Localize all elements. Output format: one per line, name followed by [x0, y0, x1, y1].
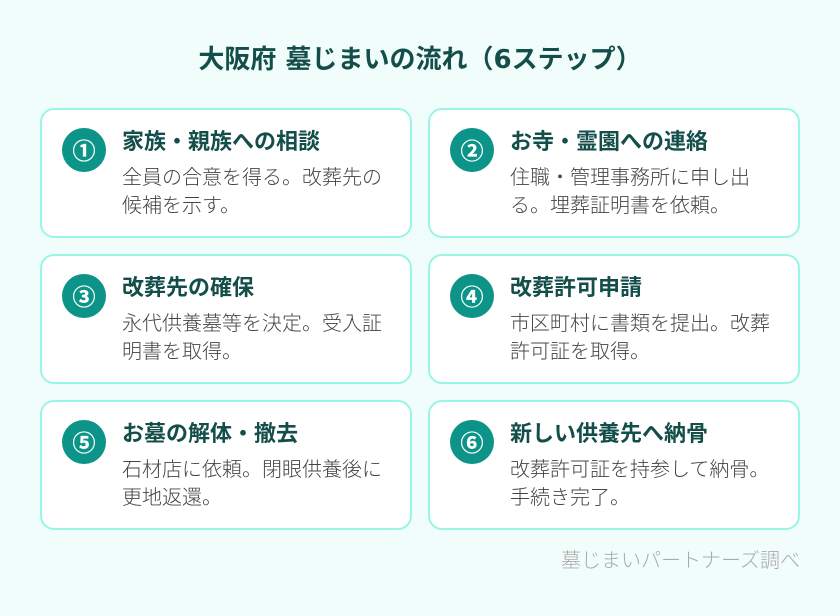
step 1 text: 全員の合意を得る。改葬先の — [122, 167, 382, 189]
step 6 text: 改葬許可証を持参して納骨。 — [510, 459, 769, 481]
step 1 text: 候補を示す。 — [122, 195, 240, 217]
panel: step 1 — [40, 108, 412, 238]
step 5 heading: お墓の解体・撤去 — [122, 421, 298, 446]
step 6 text — [510, 459, 769, 509]
icon: number 1: ① — [72, 138, 96, 164]
icon: number 3: ③ — [72, 284, 96, 310]
icon: number 5 — [62, 420, 106, 464]
step 6 heading: 新しい供養先へ納骨 — [510, 421, 708, 446]
step 5 text — [122, 459, 382, 509]
step 1 text — [122, 167, 382, 217]
step 6 text: 手続き完了。 — [510, 487, 630, 509]
icon: number 4 — [450, 274, 494, 318]
step 5 text: 更地返還。 — [122, 487, 222, 509]
icon: number 4: ④ — [460, 284, 484, 310]
source note: 墓じまいパートナーズ調べ — [561, 550, 800, 572]
step 4 text: 許可証を取得。 — [510, 341, 650, 363]
step 2 text: る。埋葬証明書を依頼。 — [510, 195, 730, 217]
icon: number 6: ⑥ — [460, 430, 484, 456]
step 2 text — [510, 167, 750, 217]
panel: step 4 — [428, 254, 800, 384]
step 3 text: 永代供養墓等を決定。受入証 — [122, 313, 382, 335]
step 3 heading: 改葬先の確保 — [122, 275, 254, 300]
panel: step 6 — [428, 400, 800, 530]
icon: number 6 — [450, 420, 494, 464]
step 2 heading: お寺・霊園への連絡 — [510, 129, 708, 154]
step 1 heading: 家族・親族への相談 — [122, 129, 320, 154]
panel: step 3 — [40, 254, 412, 384]
icon: number 5: ⑤ — [72, 430, 96, 456]
icon: number 2: ② — [460, 138, 484, 164]
step 3 text: 明書を取得。 — [122, 341, 242, 363]
step 4 text: 市区町村に書類を提出。改葬 — [510, 313, 770, 335]
panel: step 5 — [40, 400, 412, 530]
step 5 text: 石材店に依頼。閉眼供養後に — [122, 459, 382, 481]
icon: number 1 — [62, 128, 106, 172]
step 4 heading: 改葬許可申請 — [510, 275, 642, 300]
icon: number 2 — [450, 128, 494, 172]
step 4 text — [510, 313, 770, 363]
icon: number 3 — [62, 274, 106, 318]
title: 大阪府 墓じまいの流れ（6ステップ） — [198, 45, 642, 75]
panel: step 2 — [428, 108, 800, 238]
step 3 text — [122, 313, 382, 363]
step 2 text: 住職・管理事務所に申し出 — [510, 167, 750, 189]
